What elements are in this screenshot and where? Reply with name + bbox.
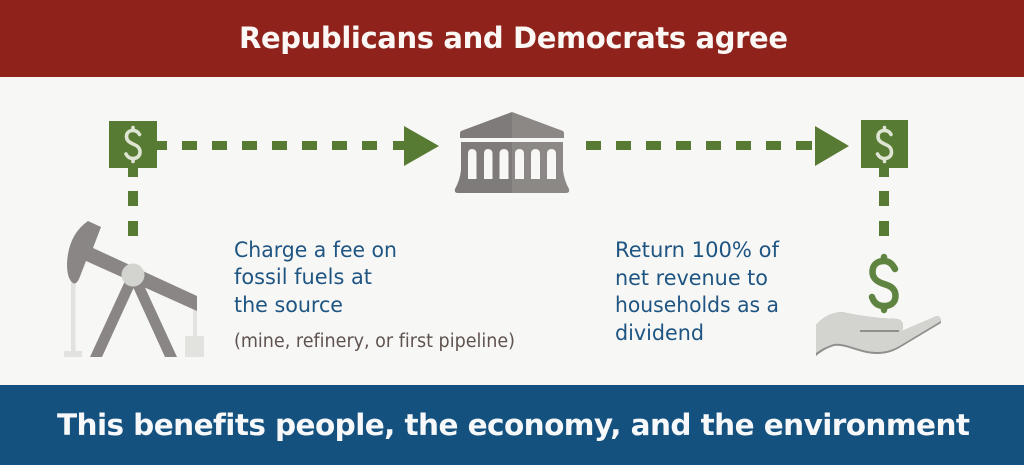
text: return revenue: Return 100% of	[615, 238, 779, 263]
conclusion heading: This benefits people, the economy, and the environment	[57, 408, 970, 442]
arrow: source to government	[157, 126, 439, 166]
bottom banner	[0, 385, 1024, 465]
arrow: dollar down to pump jack	[128, 168, 138, 236]
icon: dollar square right	[861, 120, 908, 168]
top banner	[0, 0, 1024, 77]
text: return revenue	[615, 238, 779, 346]
text: return revenue: dividend	[615, 321, 704, 346]
arrow: government to households	[586, 126, 849, 166]
title: Republicans and Democrats agree	[239, 21, 788, 55]
icon: dollar square left	[109, 121, 157, 168]
text: charge a fee	[234, 238, 397, 318]
icon: dollar over hand	[816, 257, 941, 356]
icon: government building	[455, 112, 569, 193]
text: charge a fee: Charge a fee on	[234, 238, 397, 263]
text: return revenue: households as a	[615, 293, 779, 318]
text: charge a fee: fossil fuels at	[234, 265, 372, 290]
arrow: dollar down to hand	[879, 168, 889, 236]
text: charge a fee: the source	[234, 293, 343, 318]
icon: oil pump jack	[64, 221, 204, 357]
text: return revenue: net revenue to	[615, 266, 768, 291]
text: source note: (mine, refinery, or first pipeline)	[234, 331, 515, 352]
icon: open hand	[816, 312, 941, 356]
